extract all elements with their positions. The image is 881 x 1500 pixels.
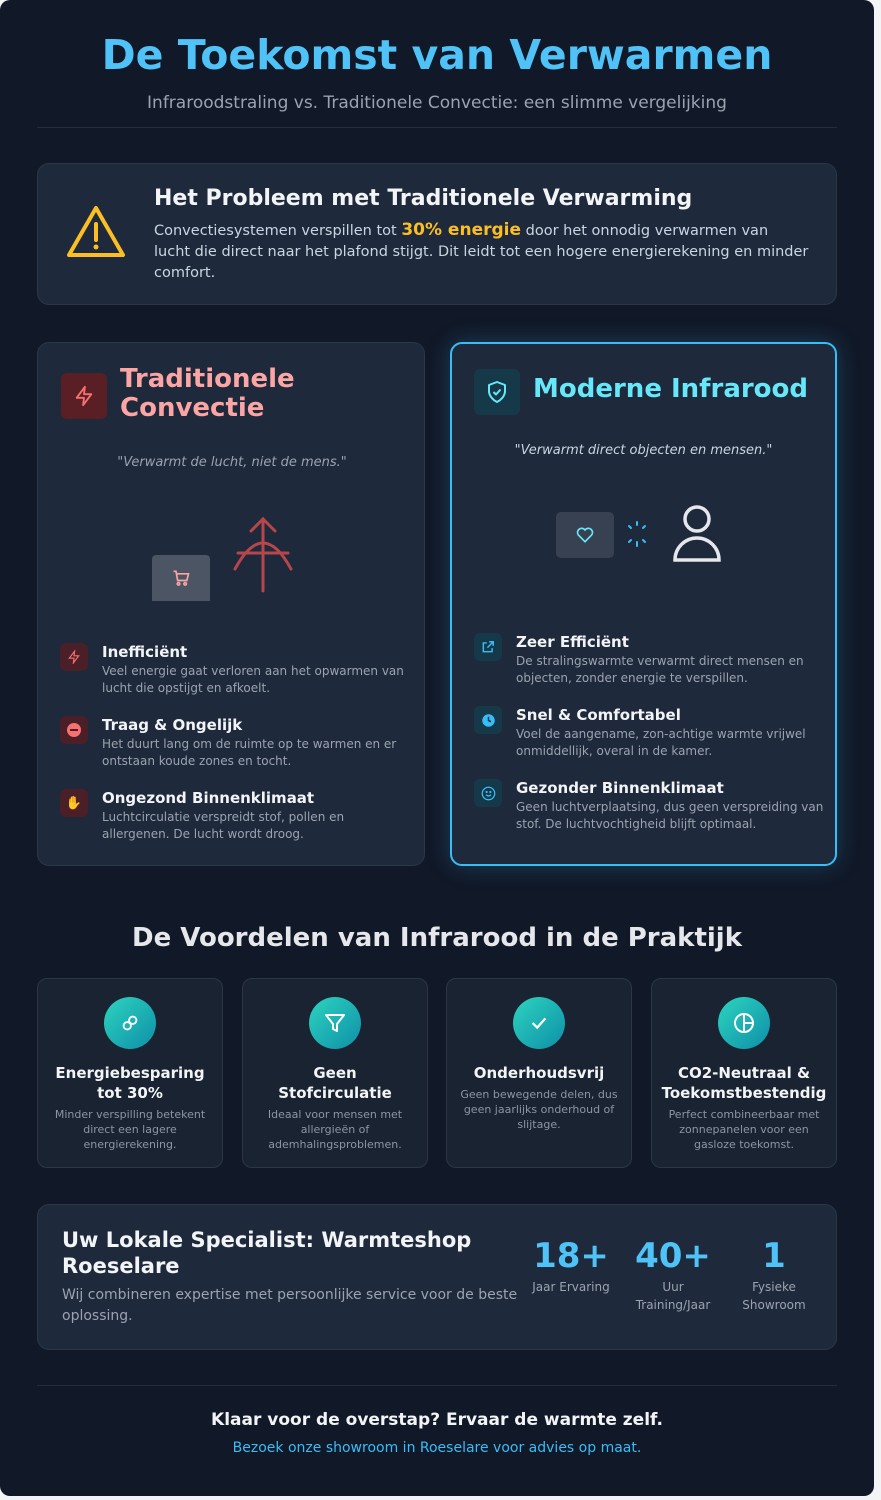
illustration: heater and rising air [152,517,292,601]
card: CO2 neutral [651,978,837,1168]
card: maintenance free [446,978,632,1168]
card: maintenance free: Geen bewegende delen, dus geen jaarlijks onderhoud of slijtage. [460,1088,618,1131]
card: no dust [242,978,428,1168]
heading: Uw Lokale Specialist: Warmteshop Roeselare [62,1228,471,1278]
heading: Moderne Infrarood [533,374,808,404]
stat: years: Jaar Ervaring [532,1280,610,1294]
heading: Convectie [120,393,264,423]
text: Wij combineren expertise met persoonlijke service voor de beste oplossing. [62,1287,517,1324]
icon: warning [67,206,126,257]
card: energy saving: Minder verspilling betekent direct een lagere energierekening. [55,1108,205,1151]
item: unhealthy: Ongezond Binnenklimaat [102,789,314,807]
quote: "Verwarmt direct objecten en mensen." [515,443,772,458]
card: CO2 neutral: CO2-Neutraal & Toekomstbestendig [662,1064,826,1102]
call to action: Klaar voor de overstap? Ervaar de warmte zelf. [211,1410,663,1430]
card: maintenance free: Onderhoudsvrij [474,1064,604,1082]
card: no dust: Geen Stofcirculatie [278,1064,392,1102]
stat: showroom: Fysieke [752,1280,796,1294]
panel: problem [37,163,837,305]
item: slow: Traag & Ongelijk [102,716,242,734]
stat: showroom: Showroom [742,1298,806,1312]
item: fast: Snel & Comfortabel [516,706,681,724]
heading: Traditionele [120,364,295,394]
call to action [211,1410,663,1456]
icon: bolt [61,373,107,419]
quote: "Verwarmt de lucht, niet de mens." [117,455,347,470]
stat: training: Training/Jaar [636,1298,710,1312]
item: efficient: Zeer Efficiënt [516,633,629,651]
item: slow: Het duurt lang om de ruimte op te warmen en er ontstaan koude zones en tocht. [102,737,396,768]
title: De Toekomst van Verwarmen [102,31,772,79]
card: energy saving [37,978,223,1168]
card: no dust: Ideaal voor mensen met allergieën of ademhalingsproblemen. [268,1108,402,1151]
stat: years: 18+ [533,1236,609,1276]
item: unhealthy: Luchtcirculatie verspreidt stof, pollen en allergenen. De lucht wordt droog. [102,810,344,841]
stat: years [532,1236,610,1294]
stat: training [635,1236,711,1312]
item: fast: Voel de aangename, zon-achtige warmte vrijwel onmiddellijk, overal in de kamer. [516,727,806,758]
item: inefficient [60,643,404,695]
panel: traditional convection [37,342,425,866]
icon: shield [474,369,520,415]
item: unhealthy: ✋ [66,796,82,810]
call to action: Bezoek onze showroom in Roeselare voor advies op maat. [233,1440,641,1456]
item: healthy: stof. De luchtvochtigheid blijft optimaal. [516,817,756,831]
section heading: benefits: De Voordelen van Infrarood in de Praktijk [132,923,742,953]
item: unhealthy [60,789,344,841]
stat: showroom: 1 [762,1236,786,1276]
heading: Het Probleem met Traditionele Verwarming [154,186,692,211]
heading [120,364,295,423]
item: healthy: Geen luchtverplaatsing, dus geen verspreiding van [516,800,823,814]
item: efficient: De stralingswarmte verwarmt direct mensen en objecten, zonder energie te verspillen. [516,654,804,685]
item: efficient [474,633,804,685]
card: CO2 neutral: Perfect combineerbaar met zonnepanelen voor een gasloze toekomst. [669,1108,819,1151]
item: slow [60,716,396,768]
panel: modern infrared [450,342,837,866]
panel: local specialist [37,1204,837,1350]
text: lucht die direct naar het plafond stijgt. Dit leidt tot een hogere energierekening en minder comfort. [154,244,808,281]
stat: training: Uur [662,1280,684,1294]
item: fast [474,706,806,758]
text: Convectiesystemen verspillen tot 30% energie door het onnodig verwarmen van [154,220,768,240]
card: energy saving: Energiebesparing tot 30% [55,1064,205,1102]
item: inefficient: Inefficiënt [102,643,187,661]
item: inefficient: Veel energie gaat verloren aan het opwarmen van lucht die opstijgt en afkoelt. [102,664,404,695]
text [154,220,808,281]
stat: showroom [742,1236,806,1312]
subtitle: Infraroodstraling vs. Traditionele Convectie: een slimme vergelijking [147,93,727,113]
stat: training: 40+ [635,1236,711,1276]
item: healthy [474,779,823,831]
illustration: panel radiating to person [556,505,721,562]
item: healthy: Gezonder Binnenklimaat [516,779,724,797]
